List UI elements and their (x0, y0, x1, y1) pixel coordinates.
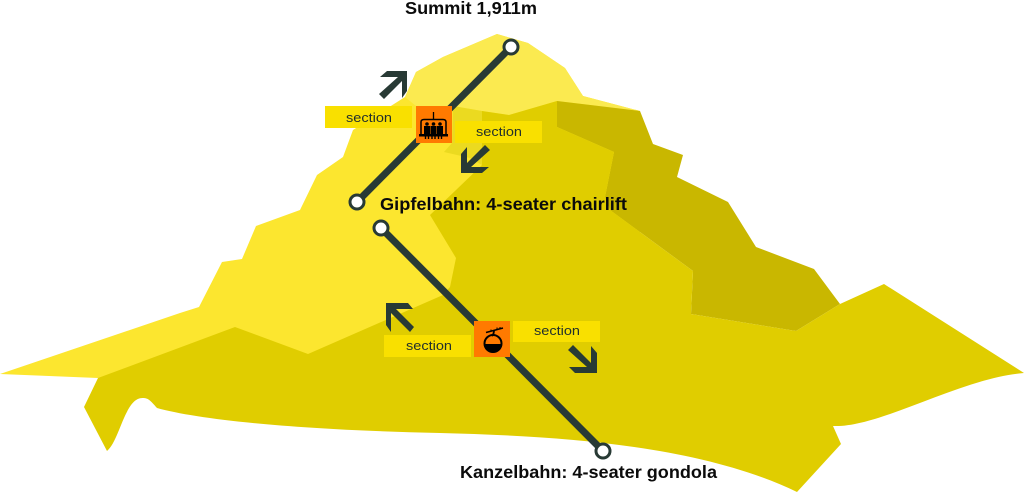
chairlift line (350, 40, 518, 209)
mountain: pale summit highlight (405, 34, 640, 115)
arrow: gondola down (568, 345, 597, 373)
heading: Gipfelbahn: Gipfelbahn: 4-seater chairlift (380, 194, 627, 214)
mountain: dark shaded ridge (557, 101, 840, 331)
section label: gondola left: section (406, 338, 452, 353)
section label: gondola right: section (534, 323, 580, 338)
arrow: gondola up (386, 303, 414, 332)
mountain: transitional shoulder (444, 106, 482, 165)
section label: gondola left (384, 335, 471, 357)
section label: gondola right (513, 321, 600, 342)
mountain: light yellow back face (0, 34, 640, 400)
arrow: chairlift down (461, 145, 490, 173)
icon: chairlift (416, 106, 452, 143)
mountain: mid yellow front face (84, 101, 1024, 492)
section label: chairlift left (325, 106, 412, 128)
heading: Kanzelbahn: Kanzelbahn: 4-seater gondola (460, 462, 717, 482)
section label: chairlift left: section (346, 110, 392, 125)
icon: gondola (474, 321, 510, 357)
section label: chairlift right (455, 121, 542, 143)
arrow: chairlift up (379, 71, 407, 99)
gondola line (374, 221, 610, 458)
section label: chairlift right: section (476, 124, 522, 139)
